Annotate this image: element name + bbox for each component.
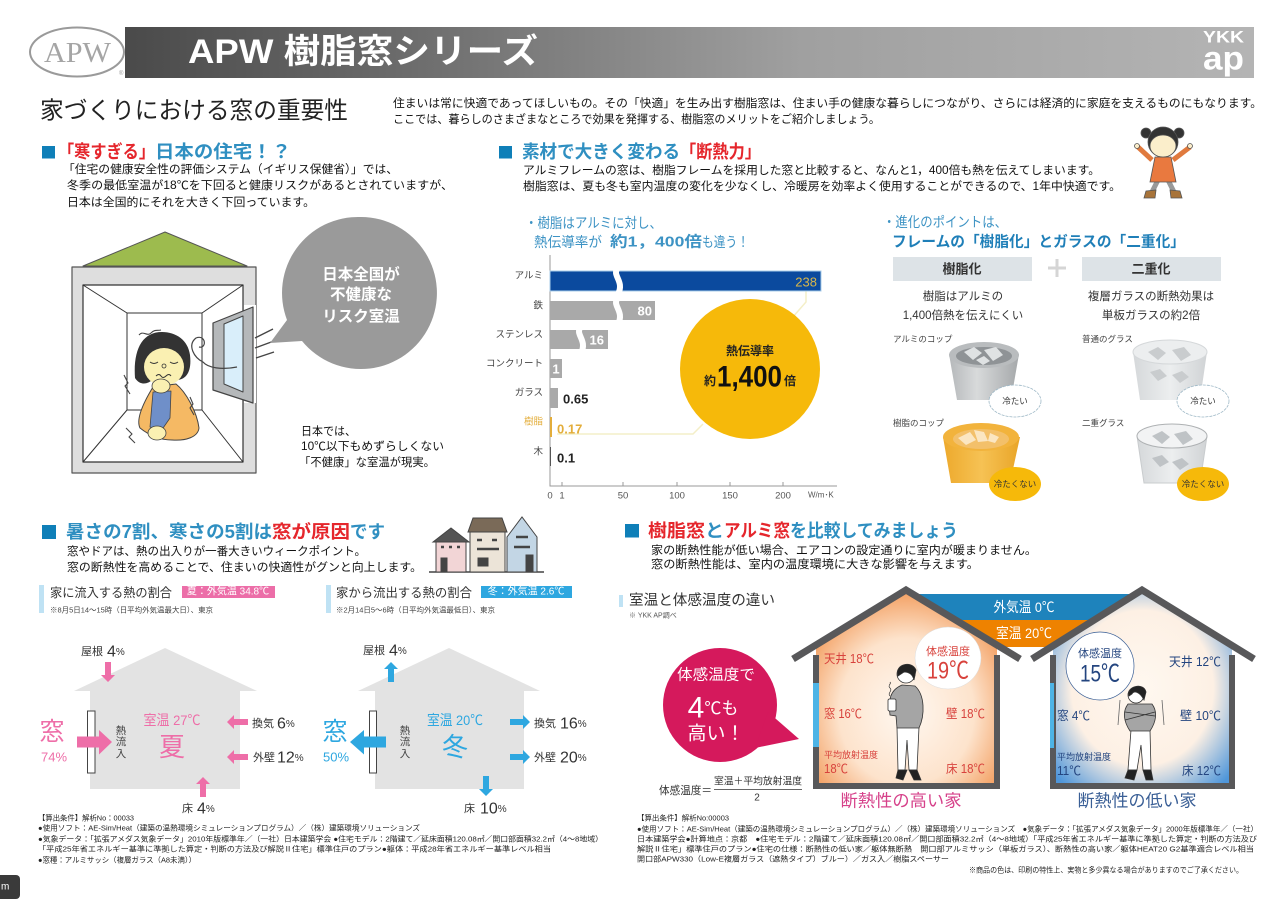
heading: cold houses <box>42 141 291 162</box>
diagram: winter house: 熱 <box>400 724 411 737</box>
text block: 樹脂窓は、夏も冬も室内温度の変化を少なくし、冷暖房を効率よく使用することができるので、1年中快適です。 <box>523 179 1121 193</box>
bar: concrete <box>486 358 562 378</box>
heading: heat flow: 暑さの7割、寒さの5割は <box>66 522 272 542</box>
footnote: calculation conditions <box>637 812 1258 874</box>
heading: heat flow <box>42 521 385 542</box>
diagram: summer house: 室温 27℃ <box>144 712 200 728</box>
labels: surface temperatures: 床 18℃ <box>946 762 985 776</box>
bar: stainless <box>495 327 608 353</box>
footnote: calculation conditions: 日本建築学会●計算地点：京都 ●住宅モデル：2階建て／延床面積120.08㎡／開口部面積32.2㎡（4～8地域）「平成25年省エネルギー基準に準拠した算定・判断の方法及び <box>637 834 1258 844</box>
diagram: winter house: 入 <box>400 748 411 760</box>
diagram: winter house: 換気 <box>534 716 556 730</box>
logo: YKK ap: YKK <box>1203 28 1245 46</box>
diagram: summer house: 6% <box>277 716 295 732</box>
bar: iron: 80 <box>638 304 652 318</box>
bar: aluminium <box>515 268 821 294</box>
label: winter heat outflow: 家から流出する熱の割合 <box>336 586 472 600</box>
text block <box>63 162 453 209</box>
axis labels: 50 <box>618 490 628 502</box>
subheading: evolution points <box>883 214 1185 250</box>
corner tag: m <box>1 882 9 892</box>
callout: 1,400 times: 約 <box>704 373 716 388</box>
figure: relaxed man <box>888 664 923 780</box>
callout: 4 degrees higher: 4℃も <box>688 692 738 724</box>
caption: room temperature: 10℃以下もめずらしくない <box>301 440 444 453</box>
column: double glazing: 単板ガラスの約2倍 <box>1102 308 1201 322</box>
footnote: calculation conditions <box>38 812 603 864</box>
text block: 窓の断熱性を高めることで、住まいの快適性がグンと向上します。 <box>67 560 422 574</box>
text block <box>651 543 1037 571</box>
text block: 冬季の最低室温が18℃を下回ると健康リスクがあるとされていますが、 <box>67 178 453 192</box>
footnote: calculation conditions: ●使用ソフト：AE-Sim/Heat（建築の温熱環境シミュレーションプログラム）／（株）建築環境ソリューションズ <box>38 822 421 832</box>
axis labels: 0 <box>547 490 553 502</box>
bar: resin: 0.17 <box>557 422 582 436</box>
speech bubble <box>270 217 437 369</box>
labels: surface temperatures: 窓 16℃ <box>824 707 862 721</box>
diagram: winter house: 流 <box>400 736 411 748</box>
bar: stainless: ステンレス <box>495 330 543 340</box>
caption: room temperature: 日本では、 <box>301 424 356 438</box>
heading: insulation <box>499 142 761 162</box>
labels: surface temperatures: 平均放射温度 <box>824 749 878 760</box>
subheading: conductivity <box>525 215 749 250</box>
illustration: cold room <box>72 232 274 473</box>
bar: iron: 鉄 <box>533 300 543 312</box>
diagram: winter house: 屋根 <box>363 644 385 657</box>
bar: glass: ガラス <box>515 388 543 398</box>
callout: felt temperature 19: 体感温度 <box>926 644 970 658</box>
diagram: summer house: 入 <box>116 748 127 760</box>
labels: surface temperatures: 天井 18℃ <box>824 652 874 666</box>
subheading: temperature difference: ※ YKK AP調べ <box>629 612 677 620</box>
figure: shivering man <box>1118 686 1164 780</box>
column: double glazing: 二重化 <box>1131 262 1171 276</box>
logo: APW: APW <box>44 37 112 69</box>
diagram: winter house: 4% <box>389 642 407 660</box>
subheading: conductivity: 約1，400倍 <box>610 232 702 250</box>
plus sign <box>1048 259 1066 277</box>
normal glass: 冷たい <box>1190 396 1216 406</box>
logo: YKK ap <box>1203 28 1245 76</box>
diagram: winter house: 床 <box>464 802 475 815</box>
caption: room temperature <box>299 424 444 469</box>
footnote: calculation conditions: 解説Ⅱ住宅」標準住戸のプラン●住宅の仕様：断熱性の低い家／躯体無断熱 開口部アルミサッシ（単板ガラス）、断熱性の高い家／躯体HEAT20 G2基準適合レベル相当 <box>637 844 1254 854</box>
double glass: 二重グラス <box>1082 418 1124 428</box>
bar: resin <box>524 416 582 437</box>
labels: surface temperatures: 窓 4℃ <box>1057 709 1090 723</box>
bar: concrete: 1 <box>552 362 560 376</box>
label: summer heat inflow <box>39 584 275 614</box>
formula: 体感温度＝ <box>659 783 712 797</box>
panel: cold houses <box>42 141 453 473</box>
house: poorly insulated <box>1032 590 1254 786</box>
normal glass: 普通のグラス <box>1082 334 1133 344</box>
footnote: calculation conditions: ※商品の色は、印刷の特性上、実物と多少異なる場合がありますのでご了承ください。 <box>969 864 1243 874</box>
subheading: evolution points: ・進化のポイントは、 <box>883 214 1007 230</box>
heading: heat flow: です <box>350 522 385 542</box>
diagram: summer house: 流 <box>116 736 127 748</box>
corner tag <box>0 875 20 899</box>
arrow: window outflow <box>350 730 386 754</box>
bar: wood <box>533 446 575 466</box>
bar: wood: 0.1 <box>557 450 575 466</box>
double glass <box>1082 418 1229 501</box>
logo: YKK ap: ap <box>1203 40 1244 76</box>
text block: 「住宅の健康安全性の評価システム（イギリス保健省）」では、 <box>63 162 398 176</box>
diagram: winter house: 16% <box>560 716 587 732</box>
callout: 4 degrees higher: 高い！ <box>687 722 745 744</box>
column: resin frame: 1,400倍熱を伝えにくい <box>903 309 1023 322</box>
diagram: summer house: 換気 <box>252 716 274 730</box>
intro text: ここでは、暮らしのさまざまなところで効果を発揮する、樹脂窓のメリットをご紹介しましょう。 <box>393 112 880 126</box>
temperature bands <box>906 594 1142 647</box>
axis labels: W/m･K <box>808 490 834 500</box>
column: resin frame: 樹脂化 <box>942 262 982 276</box>
bar: concrete: コンクリート <box>486 358 543 370</box>
text block: 窓やドアは、熱の出入りが一番大きいウィークポイント。 <box>67 544 366 558</box>
normal glass <box>1082 334 1229 417</box>
labels: surface temperatures: 壁 18℃ <box>946 707 985 721</box>
speech bubble: 不健康な <box>330 284 392 304</box>
axis labels: 100 <box>669 490 685 502</box>
double glass: 冷たくない <box>1182 479 1224 489</box>
footnote: calculation conditions: 開口部APW330（Low-E複層ガラス（遮熱タイプ）ブルー）／ガス入／樹脂スペーサー <box>637 854 949 864</box>
temperature bands: 室温 20℃ <box>996 625 1052 641</box>
bar: iron <box>533 298 655 324</box>
labels: surface temperatures: 18℃ <box>824 762 848 776</box>
caption: poorly insulated: 断熱性の低い家 <box>1078 792 1196 810</box>
diagram: summer house: 窓 <box>39 718 65 746</box>
subheading: conductivity: 熱伝導率が <box>534 234 602 250</box>
axis labels: 1 <box>559 490 565 502</box>
callout: felt temperature 19: 19℃ <box>927 658 969 684</box>
heading: insulation: 「断熱力」 <box>680 142 761 162</box>
heading: insulation: 素材で大きく変わる <box>522 142 680 162</box>
text block <box>67 544 422 574</box>
diagram: summer house: 74% <box>41 750 67 764</box>
formula <box>659 774 802 804</box>
speech bubble: 日本全国が <box>322 264 400 284</box>
subheading: evolution points: フレームの「樹脂化」とガラスの「二重化」 <box>892 232 1185 250</box>
caption: well insulated: 断熱性の高い家 <box>840 792 962 810</box>
label: summer heat inflow: 夏：外気温 34.8℃ <box>187 584 269 598</box>
footnote: calculation conditions: 【算出条件】解析No：00033 <box>38 812 134 822</box>
text block <box>523 163 1121 193</box>
column: resin frame <box>893 257 1041 501</box>
footnote: calculation conditions: 「平成25年省エネルギー基準に準拠した算定・判断の方法及び解説Ⅱ住宅」標準住戸のプラン●躯体：平成28年省エネルギー基準レベル相当 <box>38 844 551 854</box>
diagram: summer house: 4% <box>107 644 125 660</box>
heading: heat flow: 窓が原因 <box>272 521 350 542</box>
resin cup: 樹脂のコップ <box>893 418 945 428</box>
labels: surface temperatures: 壁 10℃ <box>1180 709 1221 723</box>
heading: comparison: 樹脂窓 <box>648 521 705 541</box>
callout: 1,400 times: 1,400 <box>717 360 782 394</box>
label: winter heat outflow: ※2月14日5～6時（日平均外気温最低日）、東京 <box>336 604 495 614</box>
callout: felt temperature 19 <box>915 627 981 689</box>
main heading: 家づくりにおける窓の重要性 <box>40 98 348 124</box>
header <box>30 27 1254 78</box>
diagram: summer house <box>39 644 304 818</box>
text block: アルミフレームの窓は、樹脂フレームを採用した窓と比較すると、なんと1，400倍も熱を伝えてしまいます。 <box>523 163 1100 177</box>
diagram: winter house <box>322 642 587 818</box>
diagram: summer house: 外壁 <box>253 751 275 764</box>
diagram: winter house: 10% <box>480 800 507 818</box>
arrow: window inflow <box>77 730 112 754</box>
label: winter heat outflow: 冬：外気温 2.6℃ <box>488 584 564 598</box>
callout: felt temperature 15: 体感温度 <box>1078 646 1122 660</box>
intro text: 住まいは常に快適であってほしいもの。その「快適」を生み出す樹脂窓は、住まい手の健康な暮らしにつながり、さらには経済的に家庭を支えるものにもなります。 <box>393 96 1262 110</box>
diagram: summer house: 4% <box>197 800 215 818</box>
labels: surface temperatures <box>824 652 985 776</box>
diagram: winter house: 50% <box>323 750 349 764</box>
callout: felt temperature 15: 15℃ <box>1080 660 1120 688</box>
heading: comparison: アルミ窓 <box>724 521 790 541</box>
callout: 1,400 times <box>680 299 820 439</box>
illustration: row of houses <box>429 517 544 572</box>
callout: felt temperature 15 <box>1066 632 1134 700</box>
diagram: winter house: 窓 <box>322 718 348 746</box>
callout: 1,400 times: 熱伝導率 <box>726 343 774 358</box>
label: winter heat outflow <box>326 584 572 614</box>
footnote: calculation conditions: ●気象データ：「拡張アメダス気象データ」2010年版標準年／（一社）日本建築学会 ●住宅モデル：2階建て／延床面積120.08㎡／開口部面積32.2㎡（4～8地域） <box>38 834 603 844</box>
formula: 2 <box>754 792 760 804</box>
bar: glass: 0.65 <box>563 392 588 406</box>
bar: aluminium: 238 <box>795 274 817 290</box>
labels: surface temperatures: 11℃ <box>1057 764 1081 778</box>
footnote: calculation conditions: ●使用ソフト：AE-Sim/Heat（建築の温熱環境シミュレーションプログラム）／（株）建築環境ソリューションズ ●気象データ：「拡張アメダス気象データ」2000年版標準年／（一社） <box>637 824 1258 834</box>
callout: 1,400 times: 倍 <box>784 373 796 388</box>
diagram: summer house: 床 <box>182 802 193 815</box>
subheading: temperature difference <box>619 592 775 620</box>
label: summer heat inflow: ※8月5日14～15時（日平均外気温最大日）、東京 <box>50 604 213 614</box>
logo: APW: ® <box>119 70 124 77</box>
axis labels: 200 <box>775 490 791 502</box>
header band <box>125 27 1254 78</box>
text block: 家の断熱性能が低い場合、エアコンの設定通りに室内が暖まりません。 <box>651 543 1037 557</box>
speech bubble: リスク室温 <box>322 308 400 326</box>
heading: cold houses: 日本の住宅！？ <box>155 142 291 162</box>
illustration: girl <box>1134 127 1192 198</box>
bar: glass <box>515 388 588 408</box>
text block: 日本は全国的にそれを大きく下回っています。 <box>67 195 315 209</box>
panel: heat flow <box>38 517 603 864</box>
diagram: winter house: 室温 20℃ <box>427 712 483 728</box>
diagram: winter house: 20% <box>560 750 587 766</box>
intro text <box>393 96 1262 126</box>
diagram: summer house: 12% <box>277 750 304 766</box>
axis labels <box>547 490 834 502</box>
labels: surface temperatures: 床 12℃ <box>1182 764 1221 778</box>
text block: 窓の断熱性能は、室内の温度環境に大きな影響を与えます。 <box>651 557 979 571</box>
callout: 4 degrees higher <box>663 648 799 762</box>
label: summer heat inflow: 家に流入する熱の割合 <box>50 586 172 600</box>
title: APW 樹脂窓シリーズ <box>188 32 538 71</box>
labels: surface temperatures: 平均放射温度 <box>1057 751 1111 762</box>
aluminium cup: アルミのコップ <box>893 334 953 344</box>
bar: aluminium: アルミ <box>515 270 543 282</box>
heading: comparison <box>625 521 958 541</box>
bar chart: thermal conductivity <box>486 255 837 502</box>
house: well insulated <box>793 590 1020 786</box>
footnote: calculation conditions: ●窓種：アルミサッシ（複層ガラス（A8未満）） <box>38 854 196 864</box>
diagram: winter house: 外壁 <box>534 751 556 764</box>
labels: surface temperatures: 天井 12℃ <box>1169 655 1221 669</box>
diagram: summer house: 夏 <box>159 732 185 762</box>
panel: resin vs aluminium windows <box>619 521 1258 874</box>
axis labels: 150 <box>722 490 738 502</box>
column: double glazing: 複層ガラスの断熱効果は <box>1088 290 1214 303</box>
bar: wood: 木 <box>533 446 543 458</box>
heading: cold houses: 「寒すぎる」 <box>58 141 155 162</box>
aluminium cup <box>893 334 1041 417</box>
formula: 室温＋平均放射温度 <box>714 774 802 788</box>
caption: room temperature: 「不健康」な室温が現実。 <box>299 455 435 469</box>
heading: comparison: を比較してみましょう <box>790 521 958 541</box>
resin cup <box>893 418 1041 501</box>
column: resin frame: 樹脂はアルミの <box>923 289 1003 303</box>
resin cup: 冷たくない <box>994 479 1036 489</box>
column: double glazing <box>1082 257 1229 501</box>
aluminium cup: 冷たい <box>1002 396 1028 406</box>
bar: stainless: 16 <box>590 332 604 348</box>
subheading: conductivity: ・樹脂はアルミに対し、 <box>525 215 662 231</box>
bar: resin: 樹脂 <box>524 416 543 428</box>
diagram: winter house: 冬 <box>442 732 468 762</box>
diagram: summer house: 屋根 <box>81 645 103 658</box>
heading: comparison: と <box>705 521 724 541</box>
labels: surface temperatures <box>1057 655 1221 778</box>
panel: insulation <box>486 127 1229 502</box>
logo: APW <box>30 28 124 77</box>
diagram: summer house: 熱 <box>116 724 127 737</box>
temperature bands: 外気温 0℃ <box>994 599 1054 615</box>
footnote: calculation conditions: 【算出条件】解析No:00003 <box>637 812 729 822</box>
subheading: temperature difference: 室温と体感温度の違い <box>629 592 775 609</box>
subheading: conductivity: も違う！ <box>702 234 749 250</box>
callout: 4 degrees higher: 体感温度で <box>677 666 755 684</box>
